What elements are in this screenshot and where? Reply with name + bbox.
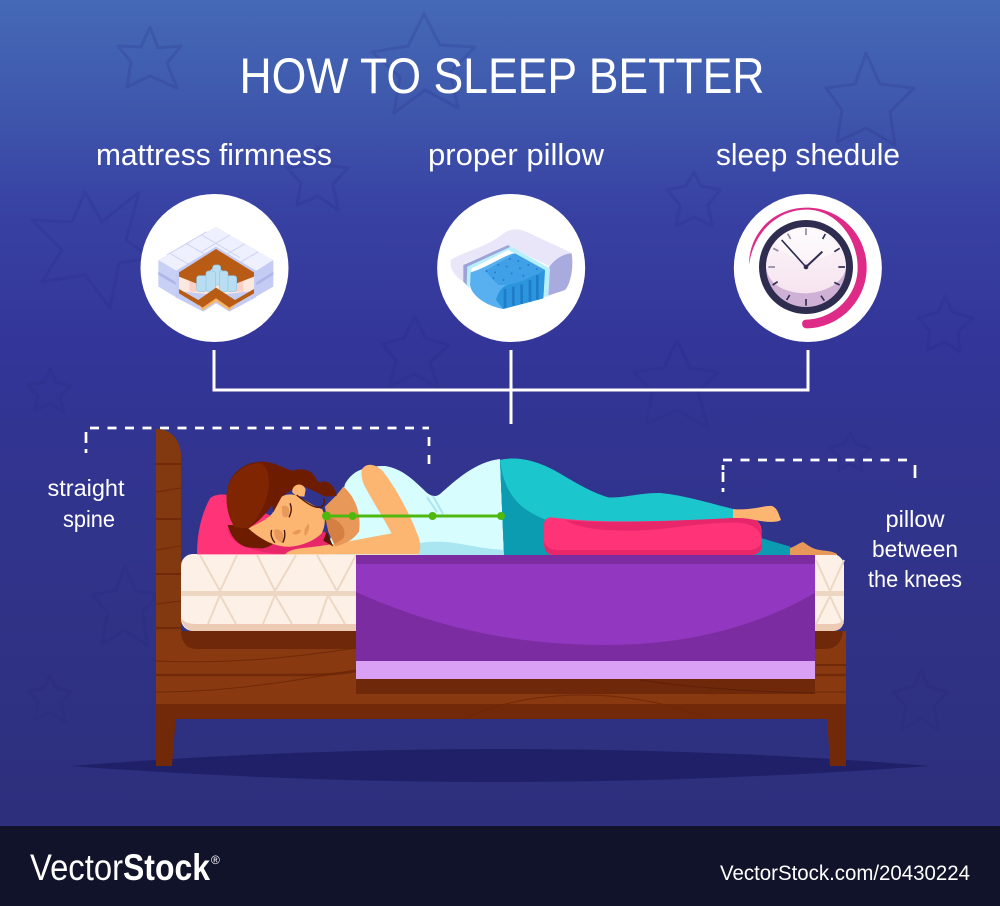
- blanket: [356, 555, 815, 694]
- label: pillow between the knees: between: [872, 536, 958, 562]
- footer bar: [0, 826, 1000, 906]
- label: straight spine: [48, 475, 125, 532]
- spine alignment line: [322, 512, 505, 520]
- footer image id: VectorStock.com/20430224: [720, 862, 970, 885]
- label: pillow between the knees: pillow: [886, 506, 945, 532]
- footer logo: [30, 847, 220, 888]
- floor shadow: [71, 749, 930, 782]
- footer logo: Stock: [123, 847, 210, 888]
- connector bracket: [214, 350, 808, 424]
- label: straight spine: spine: [63, 506, 115, 532]
- label: pillow between the knees: [868, 506, 962, 592]
- torso shirt: [330, 459, 504, 555]
- dashed callout: straight spine: [86, 428, 429, 464]
- icon: wall clock with pink arc: [734, 194, 882, 342]
- footer logo: Vector: [30, 847, 123, 888]
- title: HOW TO SLEEP BETTER: [240, 48, 764, 104]
- lower foot: [790, 542, 837, 555]
- dashed callout: pillow between the knees: [723, 460, 915, 492]
- legs in trousers: [500, 459, 790, 555]
- mattress: [181, 554, 844, 631]
- headboard: [156, 429, 181, 640]
- arm: [285, 465, 420, 554]
- knee pillow: [544, 517, 762, 555]
- head and neck: [227, 462, 360, 548]
- heading: proper pillow: proper pillow: [428, 137, 605, 172]
- heading: mattress firmness: mattress firmness: [96, 137, 332, 172]
- heading: sleep shedule: sleep shedule: [716, 137, 900, 172]
- sleeping woman: [197, 459, 837, 555]
- upper foot: [733, 506, 781, 522]
- icon: mattress cross-section: [140, 194, 288, 342]
- icon: orthopedic pillow: [437, 194, 585, 342]
- background stars: [28, 14, 973, 730]
- head pillow: [197, 494, 333, 554]
- bed frame: [156, 429, 846, 766]
- label: straight spine: straight: [48, 475, 125, 501]
- label: pillow between the knees: the knees: [868, 566, 962, 592]
- footer logo: ®: [211, 853, 220, 867]
